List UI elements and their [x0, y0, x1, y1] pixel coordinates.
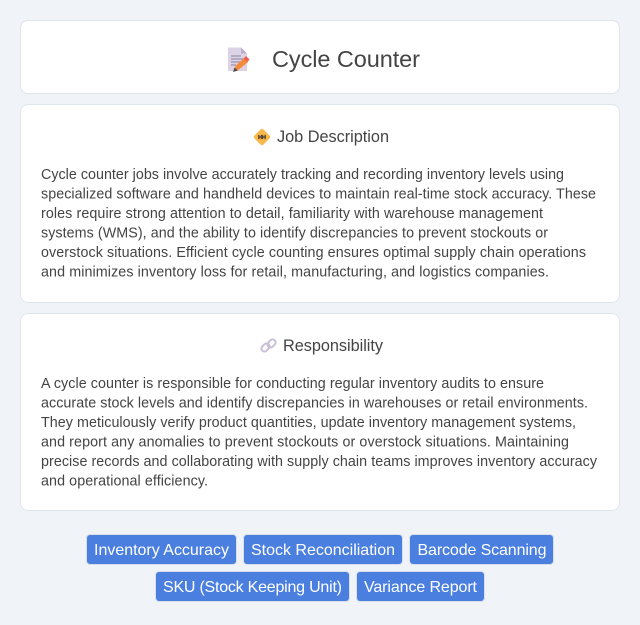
text block: responsibility: and report any anomalies to prevent stockouts or overstock situations. Maintaining: [41, 434, 569, 450]
text block: responsibility: They meticulously verify product quantities, update inventory management systems,: [41, 415, 576, 431]
tag: stock reconciliation: [243, 534, 403, 565]
tag: inventory accuracy: [86, 534, 237, 565]
heading: responsibility: Responsibility: [283, 337, 384, 355]
panel: job description: [20, 104, 620, 303]
text block: job description: specialized software and handheld devices to maintain real-time stock accuracy. These: [41, 186, 596, 202]
tag: stock reconciliation: Stock Reconciliation: [251, 542, 395, 559]
title: Cycle Counter: [272, 46, 420, 72]
tag: sku: SKU (Stock Keeping Unit): [163, 579, 342, 596]
tag: sku: [155, 571, 350, 602]
text block: job description: systems (WMS), and the ability to identify discrepancies to prevent stockouts or: [41, 226, 548, 242]
text block: job description: and minimizes inventory loss for retail, manufacturing, and logistics companies.: [41, 264, 549, 280]
text block: responsibility: accurate stock levels and identify discrepancies in warehouses or retail environments.: [41, 396, 588, 412]
text block: responsibility: and operational efficiency.: [41, 474, 208, 490]
tag: barcode scanning: Barcode Scanning: [418, 542, 546, 559]
tag: inventory accuracy: Inventory Accuracy: [94, 542, 229, 559]
text block: job description: [41, 167, 596, 280]
tag: barcode scanning: [409, 534, 554, 565]
icon: chain link: [260, 338, 276, 352]
text block: responsibility: A cycle counter is responsible for conducting regular inventory audits to ensure: [41, 376, 544, 392]
text block: job description: Cycle counter jobs involve accurately tracking and recording inventory levels using: [41, 167, 564, 183]
panel: responsibility: [20, 313, 620, 511]
tag: variance report: [356, 571, 485, 602]
icon: document with pencil: [228, 48, 250, 72]
panel: title card: [20, 20, 620, 94]
icon: diamond sign: [254, 128, 270, 146]
text block: responsibility: precise records and collaborating with supply chain teams improves inventory accuracy: [41, 454, 598, 470]
text block: job description: roles require strong attention to detail, familiarity with warehouse management: [41, 206, 543, 222]
heading: job description: Job Description: [277, 128, 389, 146]
text block: job description: overstock situations. Efficient cycle counting ensures optimal supply chain operations: [41, 245, 586, 261]
tag: variance report: Variance Report: [364, 579, 478, 596]
text block: responsibility: [41, 376, 598, 490]
